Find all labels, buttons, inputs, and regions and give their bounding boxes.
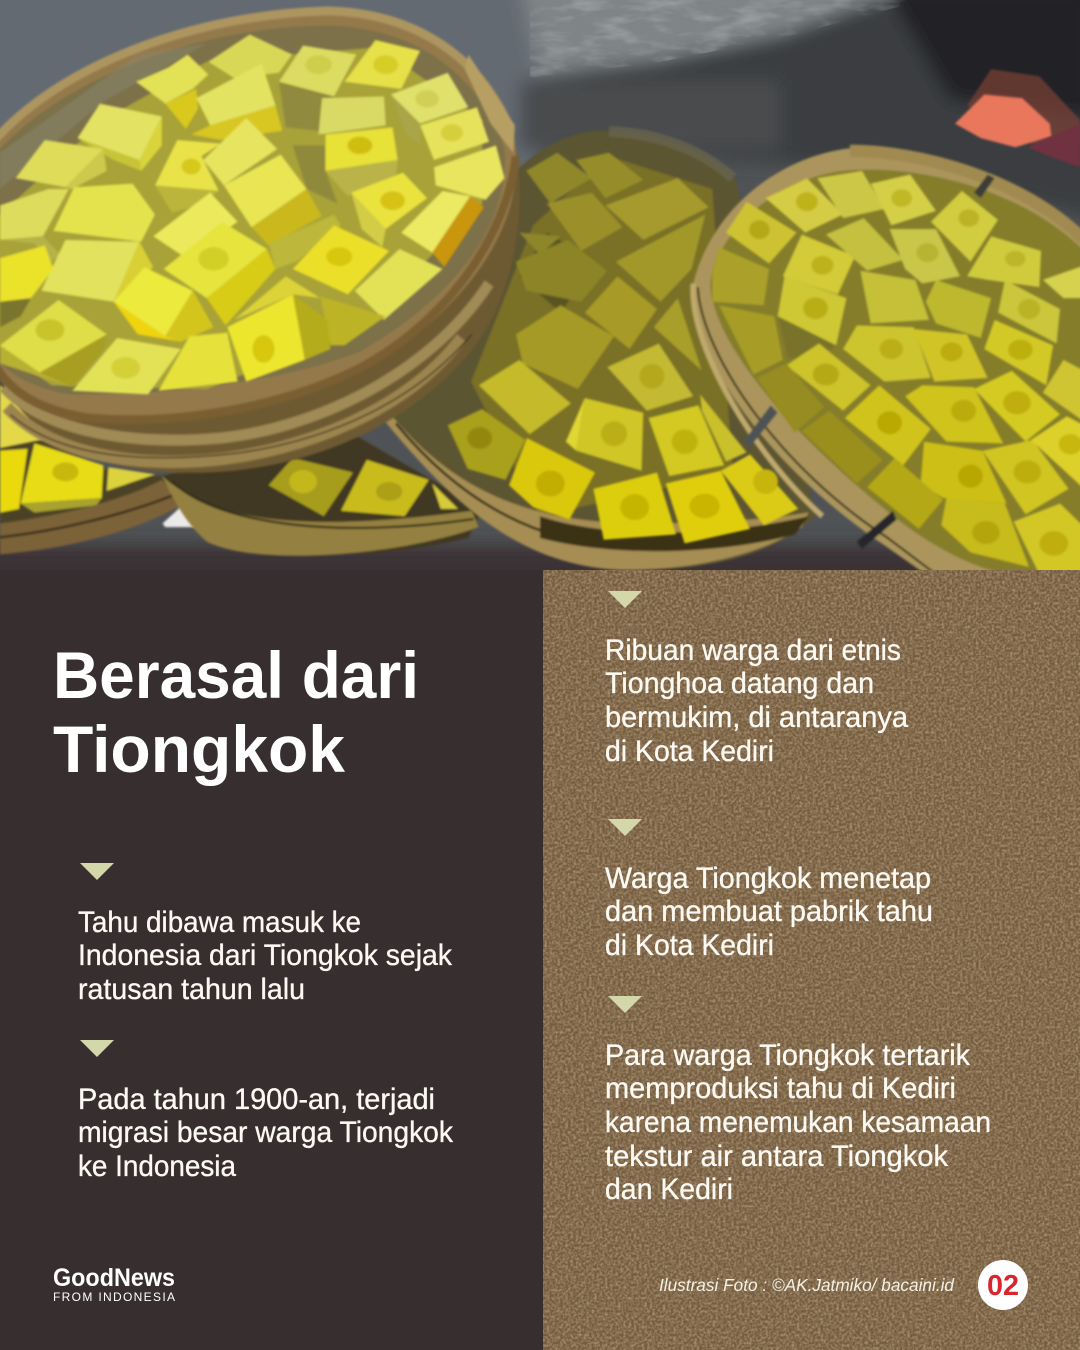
bottom centre tray [162, 429, 482, 556]
text block: kesamaan tekstur air: memproduksi tahu di Kediri [605, 1072, 956, 1105]
text block: ribuan warga: Ribuan warga dari etnis [605, 634, 901, 667]
panel: right textured brown background [543, 570, 1080, 1350]
text block: migrasi 1900-an [78, 1083, 454, 1183]
centre tray body and rim [382, 131, 816, 570]
right tray tofu blocks [712, 171, 1080, 574]
title: Tiongkok [53, 712, 345, 786]
text block: ribuan warga: di Kota Kediri [605, 735, 774, 768]
front tray tofu blocks [0, 35, 505, 394]
icon: triangle marker left 2 [80, 1040, 114, 1057]
photo: steamed yellow tofu on bamboo trays [0, 0, 1080, 595]
text block: pabrik tahu [605, 862, 933, 962]
text block: ribuan warga: bermukim, di antaranya [605, 701, 908, 734]
text block: migrasi 1900-an: ke Indonesia [78, 1150, 236, 1183]
right tray body and rim [693, 148, 1080, 574]
ember glow in the furnace [955, 69, 1080, 167]
text block: kesamaan tekstur air: Para warga Tiongkok tertarik [605, 1039, 971, 1072]
text block: kesamaan tekstur air: tekstur air antara Tiongkok [605, 1140, 949, 1173]
logo: GoodNews from Indonesia: FROM INDONESIA [53, 1290, 175, 1304]
text block: pabrik tahu: dan membuat pabrik tahu [605, 895, 933, 928]
photo credit: Ilustrasi Foto : ©AK.Jatmiko/ bacaini.id [659, 1275, 955, 1295]
icon: triangle marker left 1 [80, 863, 114, 880]
title: Berasal dari [53, 638, 419, 712]
stacked bamboo rims [0, 145, 520, 473]
panel: left dark background [0, 570, 543, 1350]
text block: migrasi 1900-an: Pada tahun 1900-an, terjadi [78, 1083, 435, 1116]
page number badge [978, 1260, 1028, 1310]
icon: triangle marker right 3 [608, 996, 642, 1013]
photo background: wall, smoke and floor [0, 0, 1080, 595]
lower-left tray with bright tofu [0, 382, 215, 554]
large front tray with tofu [0, 7, 520, 473]
text block: pabrik tahu: di Kota Kediri [605, 929, 774, 962]
text block: tahu dibawa masuk [78, 906, 453, 1006]
text block: kesamaan tekstur air [605, 1039, 991, 1206]
icon: triangle marker right 2 [608, 819, 642, 836]
text block: migrasi 1900-an: migrasi besar warga Tiongkok [78, 1116, 454, 1149]
logo: GoodNews from Indonesia: GoodNews [53, 1264, 175, 1292]
icon: triangle marker right 1 [608, 591, 642, 608]
title [53, 638, 419, 786]
text block: kesamaan tekstur air: karena menemukan kesamaan [605, 1106, 991, 1139]
text block: tahu dibawa masuk: ratusan tahun lalu [78, 973, 305, 1006]
text block: tahu dibawa masuk: Tahu dibawa masuk ke [78, 906, 361, 939]
logo: GoodNews from Indonesia [53, 1264, 175, 1304]
text block: tahu dibawa masuk: Indonesia dari Tiongkok sejak [78, 939, 453, 972]
text block: kesamaan tekstur air: dan Kediri [605, 1173, 733, 1206]
centre tray tofu blocks [448, 153, 798, 543]
text block: ribuan warga [605, 634, 908, 768]
centre tray: dim tofu behind steam [382, 131, 1080, 574]
text block: pabrik tahu: Warga Tiongkok menetap [605, 862, 931, 895]
page number badge: 02 [987, 1270, 1019, 1302]
front tray rim and interior [0, 7, 516, 423]
text block: ribuan warga: Tionghoa datang dan [605, 667, 874, 700]
